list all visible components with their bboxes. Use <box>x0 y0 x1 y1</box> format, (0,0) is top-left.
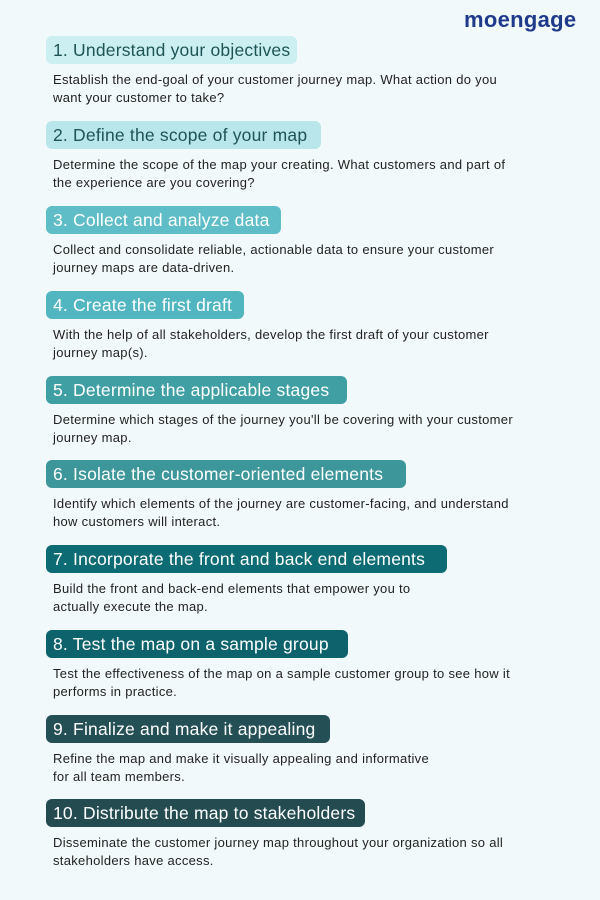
text 2: Determine the scope of the map your creating. What customers and part of <box>53 157 505 172</box>
heading 4 <box>46 291 244 319</box>
text 9 <box>53 751 429 784</box>
text 10 <box>53 835 503 868</box>
text 8: performs in practice. <box>53 684 177 699</box>
heading 10: 10. Distribute the map to stakeholders <box>53 803 355 823</box>
heading 10 <box>46 799 365 827</box>
text 6: Identify which elements of the journey are customer-facing, and understand <box>53 496 509 511</box>
heading 3 <box>46 206 281 234</box>
text 7: actually execute the map. <box>53 599 208 614</box>
heading 9 <box>46 715 330 743</box>
text 9: for all team members. <box>53 769 185 784</box>
heading 7 <box>46 545 447 573</box>
text 1 <box>53 72 497 105</box>
heading 7: 7. Incorporate the front and back end elements <box>53 549 425 569</box>
heading 1 <box>46 36 297 64</box>
heading 8 <box>46 630 348 658</box>
text 4: journey map(s). <box>53 345 148 360</box>
text 10: Disseminate the customer journey map throughout your organization so all <box>53 835 503 850</box>
text 6 <box>53 496 509 529</box>
text 3 <box>52 242 494 275</box>
heading 2: 2. Define the scope of your map <box>53 125 307 145</box>
heading 1: 1. Understand your objectives <box>53 40 290 60</box>
text 7: Build the front and back-end elements that empower you to <box>53 581 410 596</box>
text 9: Refine the map and make it visually appealing and informative <box>53 751 429 766</box>
text 2 <box>53 157 505 190</box>
text 1: want your customer to take? <box>53 90 224 105</box>
text 8: Test the effectiveness of the map on a sample customer group to see how it <box>53 666 510 681</box>
heading 6 <box>46 460 406 488</box>
text 5: Determine which stages of the journey you'll be covering with your customer <box>53 412 513 427</box>
text 4: With the help of all stakeholders, develop the first draft of your customer <box>53 327 489 342</box>
heading 9: 9. Finalize and make it appealing <box>53 719 315 739</box>
text 2: the experience are you covering? <box>53 175 255 190</box>
heading 8: 8. Test the map on a sample group <box>53 634 329 654</box>
text 3: Collect and consolidate reliable, actionable data to ensure your customer <box>53 242 494 257</box>
text 1: Establish the end-goal of your customer journey map. What action do you <box>53 72 497 87</box>
logo: moengage <box>464 7 576 32</box>
text 8 <box>53 666 510 699</box>
heading 2 <box>46 121 321 149</box>
text 7 <box>53 581 410 614</box>
text 6: how customers will interact. <box>53 514 220 529</box>
text 5 <box>52 412 513 445</box>
heading 3: 3. Collect and analyze data <box>53 210 270 230</box>
heading 4: 4. Create the first draft <box>53 295 232 315</box>
text 5: journey map. <box>53 430 132 445</box>
text 4 <box>52 327 489 360</box>
heading 6: 6. Isolate the customer-oriented elements <box>53 464 383 484</box>
text 10: stakeholders have access. <box>53 853 214 868</box>
heading 5 <box>46 376 347 404</box>
heading 5: 5. Determine the applicable stages <box>53 380 329 400</box>
text 3: journey maps are data-driven. <box>53 260 234 275</box>
